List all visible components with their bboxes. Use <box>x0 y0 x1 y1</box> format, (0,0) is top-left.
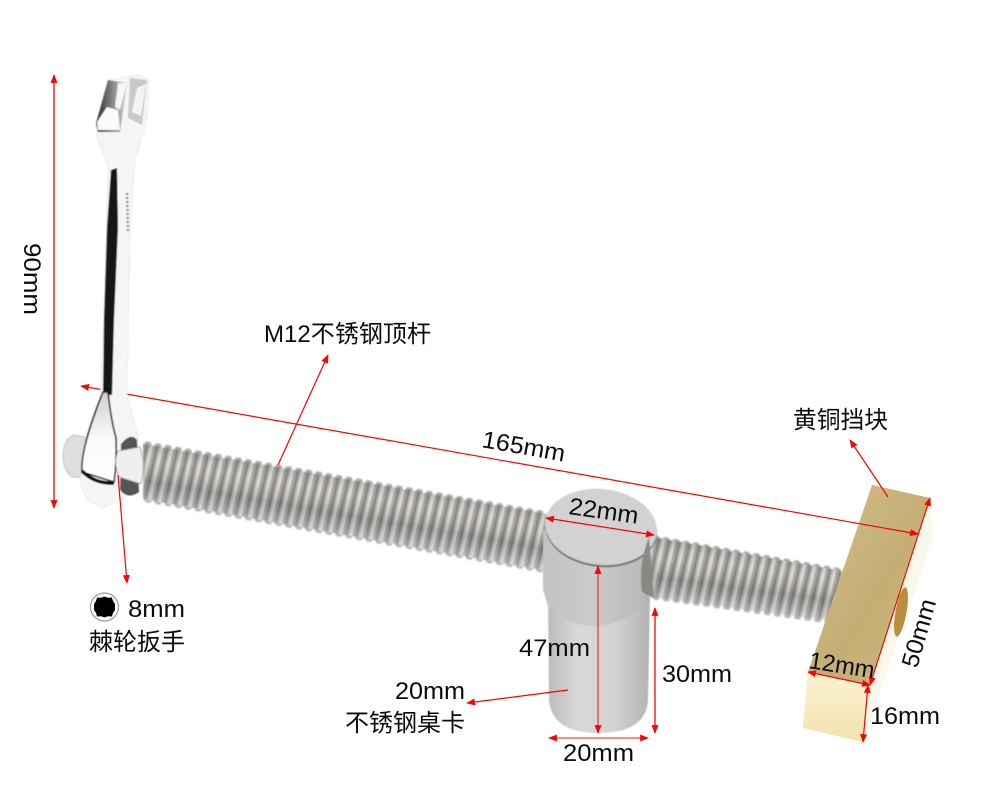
arrow: 47mm height <box>597 566 599 733</box>
wrench handle dark reflection <box>103 168 118 395</box>
label: 90mm: 90mm <box>18 243 45 315</box>
arrow: 165mm total length <box>81 386 918 534</box>
left thread section <box>143 444 547 571</box>
arrow: 20mm diameter <box>549 737 648 739</box>
label: 12mm: 12mm <box>807 647 876 684</box>
label: stainless steel bench dog: 不锈钢桌卡 <box>345 710 465 737</box>
brass stop block <box>803 485 932 742</box>
wrench body <box>80 75 149 508</box>
label: 20mm bench dog diameter: 20mm <box>395 678 465 705</box>
icon: 12-point socket <box>90 593 118 621</box>
wrench right jaw <box>128 78 147 125</box>
brass end face <box>803 672 870 742</box>
arrow: brass block leader <box>850 440 888 497</box>
wrench left jaw <box>96 80 127 132</box>
ratchet wrench <box>63 75 149 508</box>
label: 50mm: 50mm <box>897 596 942 671</box>
label: 20mm lower: 20mm <box>563 740 634 767</box>
wrench ring bottom shadow <box>82 471 114 483</box>
arrow: 90mm wrench length <box>53 75 55 508</box>
thread socket shadow <box>641 537 654 598</box>
arrow: M12 rod leader <box>278 355 328 465</box>
brass top face <box>808 485 930 685</box>
screw: M12 threaded rod <box>143 444 842 622</box>
label: 22mm: 22mm <box>567 493 640 530</box>
label: 47mm: 47mm <box>519 635 590 662</box>
wrench left jaw highlights <box>97 83 127 130</box>
label: M12 stainless steel rod: M12不锈钢顶杆 <box>264 321 431 348</box>
cylinder top face <box>541 485 661 573</box>
cylinder upper section <box>543 530 645 627</box>
cylinder lower section <box>548 595 650 733</box>
wrench hex bolt head <box>63 435 88 478</box>
label: 165mm: 165mm <box>480 426 567 467</box>
label: 16mm: 16mm <box>870 703 940 730</box>
wrench ring teardrop <box>82 392 116 482</box>
label: 8mm: 8mm <box>128 596 185 623</box>
arrow: 16mm block height <box>863 685 868 742</box>
brass threaded hole <box>891 586 911 638</box>
arrow: 50mm block length <box>870 498 930 685</box>
brass side face <box>863 498 932 742</box>
label: brass stop: 黄铜挡块 <box>793 407 888 434</box>
stainless steel bench dog cylinder <box>541 483 661 733</box>
arrow: 22mm diameter <box>546 518 654 535</box>
arrow: ratchet wrench leader <box>118 475 127 583</box>
label: 30mm: 30mm <box>662 661 732 688</box>
arrow: 30mm height <box>654 608 656 733</box>
wrench collar <box>116 437 143 496</box>
label: ratchet wrench: 棘轮扳手 <box>89 629 185 656</box>
arrow: bench dog leader <box>467 690 568 703</box>
arrow: 12mm block width <box>808 672 870 685</box>
wrench engraved marking <box>127 193 128 232</box>
wrench right jaw highlight <box>132 84 146 116</box>
right thread section <box>642 535 842 622</box>
